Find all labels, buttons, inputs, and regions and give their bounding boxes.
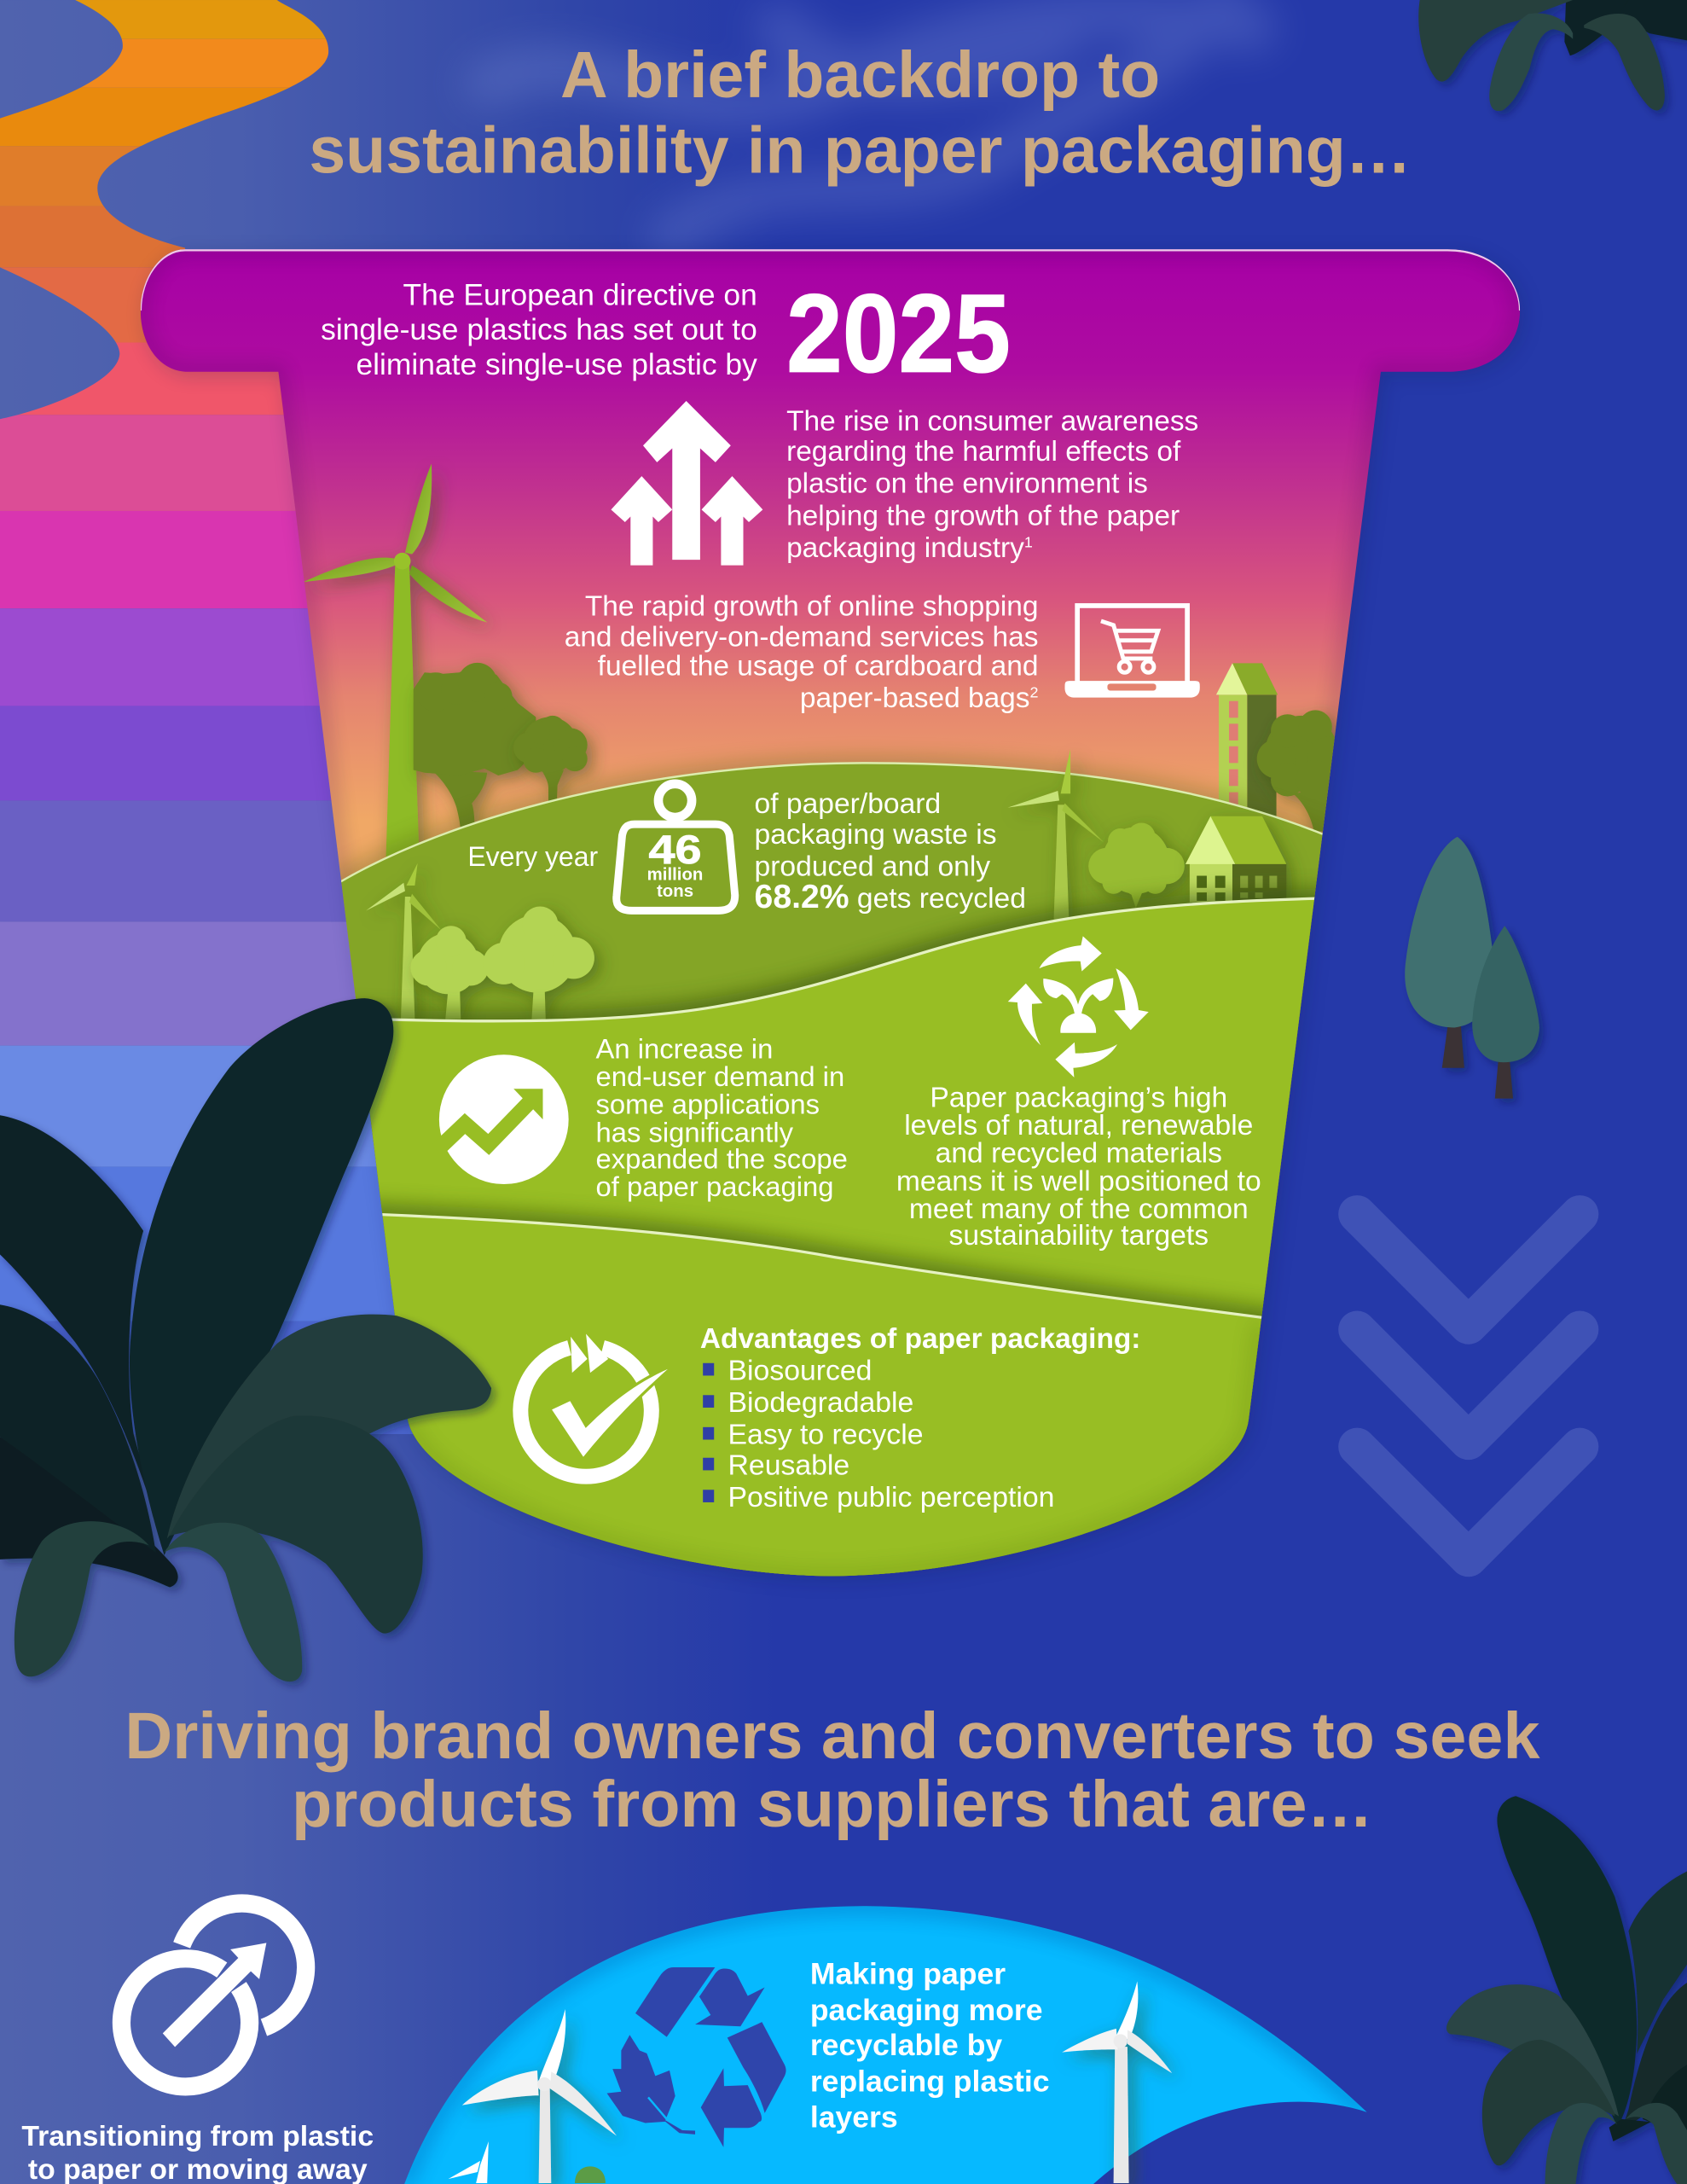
text: European directive: The European directive on	[403, 277, 757, 311]
text: consumer awareness: helping the growth of the paper	[786, 500, 1180, 531]
text: renewable materials: levels of natural, renewable	[904, 1110, 1253, 1141]
text: making paper recyclable	[810, 1957, 1049, 2135]
panel: paper cup	[125, 244, 1545, 1588]
wind turbine: white right	[1062, 1981, 1172, 2183]
plant: top right	[1418, 0, 1687, 111]
icon: weight 46 million tons: 46	[649, 828, 702, 873]
text: consumer awareness: The rise in consumer awareness	[786, 405, 1198, 437]
text: renewable materials: and recycled materials	[936, 1138, 1222, 1170]
text: online shopping: fuelled the usage of cardboard and	[598, 651, 1038, 682]
list: advantages: Easy to recycle	[728, 1418, 923, 1450]
text: end-user demand: end-user demand in	[596, 1060, 844, 1092]
text: end-user demand: of paper packaging	[596, 1170, 833, 1202]
icon: weight 46 million tons: million	[647, 865, 703, 884]
icon: laptop with cart	[1064, 606, 1200, 698]
icon: transition rings with arrow	[121, 1903, 306, 2087]
icon: chevrons	[1357, 1214, 1580, 1558]
text: consumer awareness: 1	[1024, 533, 1033, 550]
text: every year: Every year	[467, 841, 598, 872]
heading: backdrop: sustainability in paper packaging…	[309, 113, 1412, 187]
text: end-user demand: has significantly	[596, 1116, 794, 1147]
text: renewable materials	[896, 1082, 1261, 1252]
text: making paper recyclable: Making paper	[810, 1957, 1006, 1991]
layered paper stripes	[0, 0, 413, 1434]
text: end-user demand: expanded the scope	[596, 1142, 848, 1174]
list: advantages: Advantages of paper packaging:	[700, 1323, 1140, 1355]
tree: mid-right	[1088, 823, 1185, 908]
heading: backdrop: A brief backdrop to	[560, 38, 1160, 112]
text: consumer awareness	[786, 405, 1198, 564]
hill: middle	[334, 888, 1336, 1588]
icon: recycling with leaf	[607, 1967, 786, 2147]
text: European directive	[321, 277, 757, 381]
wind turbine: white left	[462, 2009, 617, 2183]
icon: growth chart circle	[437, 1054, 569, 1184]
text: packaging waste: of paper/board	[755, 788, 941, 820]
list: advantages	[700, 1323, 1140, 1513]
text: consumer awareness: regarding the harmful effects of	[786, 436, 1181, 468]
list: advantages: Biodegradable	[728, 1386, 913, 1419]
tree: green tip	[575, 2166, 606, 2183]
text: end-user demand: some applications	[596, 1089, 820, 1120]
text: making paper recyclable: replacing plastic	[810, 2064, 1049, 2098]
icon: weight 46 million tons: tons	[657, 882, 693, 901]
text: online shopping: and delivery-on-demand services has	[565, 621, 1038, 653]
text: online shopping: paper-based bags	[800, 682, 1029, 714]
wind turbine: white tiny	[449, 2141, 489, 2183]
text: online shopping: 2	[1029, 684, 1038, 701]
hill: back	[334, 756, 1336, 1588]
icon: three up arrows	[611, 401, 762, 566]
text: packaging waste	[755, 788, 1026, 915]
wind turbine: small right	[1008, 749, 1104, 921]
text: end-user demand: An increase in	[596, 1032, 773, 1064]
number: 2025: 2025	[786, 271, 1011, 396]
heading: driving brand owners: products from suppliers that are…	[292, 1768, 1373, 1841]
icon: recycling arrows with sprout	[1008, 936, 1149, 1077]
heading: driving brand owners	[125, 1699, 1540, 1841]
panel: blue hill	[403, 1906, 1367, 2184]
text: transitioning from plastic	[21, 2120, 374, 2184]
text: making paper recyclable: layers	[810, 2100, 898, 2135]
text: making paper recyclable: recyclable by	[810, 2028, 1002, 2062]
list: advantages: Reusable	[728, 1449, 849, 1481]
wind turbine: small left	[366, 863, 441, 1019]
text: packaging waste: 68.2% gets recycled	[755, 879, 1026, 915]
text: packaging waste: produced and only	[755, 851, 990, 883]
text: renewable materials: Paper packaging’s high	[930, 1082, 1227, 1113]
list: advantages: Biosourced	[728, 1354, 872, 1386]
text: European directive: single-use plastics has set out to	[321, 312, 757, 346]
text: making paper recyclable: packaging more	[810, 1993, 1043, 2027]
text: renewable materials: sustainability targets	[949, 1220, 1209, 1252]
text: packaging waste: packaging waste is	[755, 819, 997, 851]
list: advantages: Positive public perception	[728, 1481, 1054, 1513]
plant: large left	[0, 998, 491, 1682]
text: renewable materials: means it is well positioned to	[896, 1165, 1261, 1197]
tree: dark back-left large	[414, 663, 536, 835]
smoke haze	[487, 0, 1253, 236]
icon: weight 46 million tons	[617, 784, 735, 910]
text: European directive: eliminate single-use plastic by	[356, 347, 757, 381]
house	[1186, 816, 1286, 903]
tree: dark right	[1257, 710, 1352, 831]
heading: driving brand owners: Driving brand owners and converters to seek	[125, 1699, 1540, 1773]
icon: checkmark in circular arrow	[520, 1333, 675, 1477]
heading: backdrop	[309, 38, 1412, 187]
text: consumer awareness: packaging industry	[786, 532, 1024, 564]
hill: front	[334, 1201, 1280, 1588]
text: renewable materials: meet many of the common	[909, 1194, 1249, 1225]
text: end-user demand	[596, 1032, 848, 1202]
trees: teal right	[1405, 837, 1539, 1099]
wind turbine: large	[304, 463, 487, 870]
plant: bottom right	[1446, 1796, 1687, 2184]
building	[1216, 663, 1278, 834]
text: online shopping	[565, 590, 1038, 714]
trees: light front-left	[410, 906, 594, 1019]
text: consumer awareness: plastic on the environment is	[786, 468, 1148, 500]
tree: dark back-left small	[513, 716, 588, 808]
text: transitioning from plastic: Transitioning from plastic	[21, 2120, 374, 2152]
text: online shopping: The rapid growth of online shopping	[585, 590, 1038, 622]
